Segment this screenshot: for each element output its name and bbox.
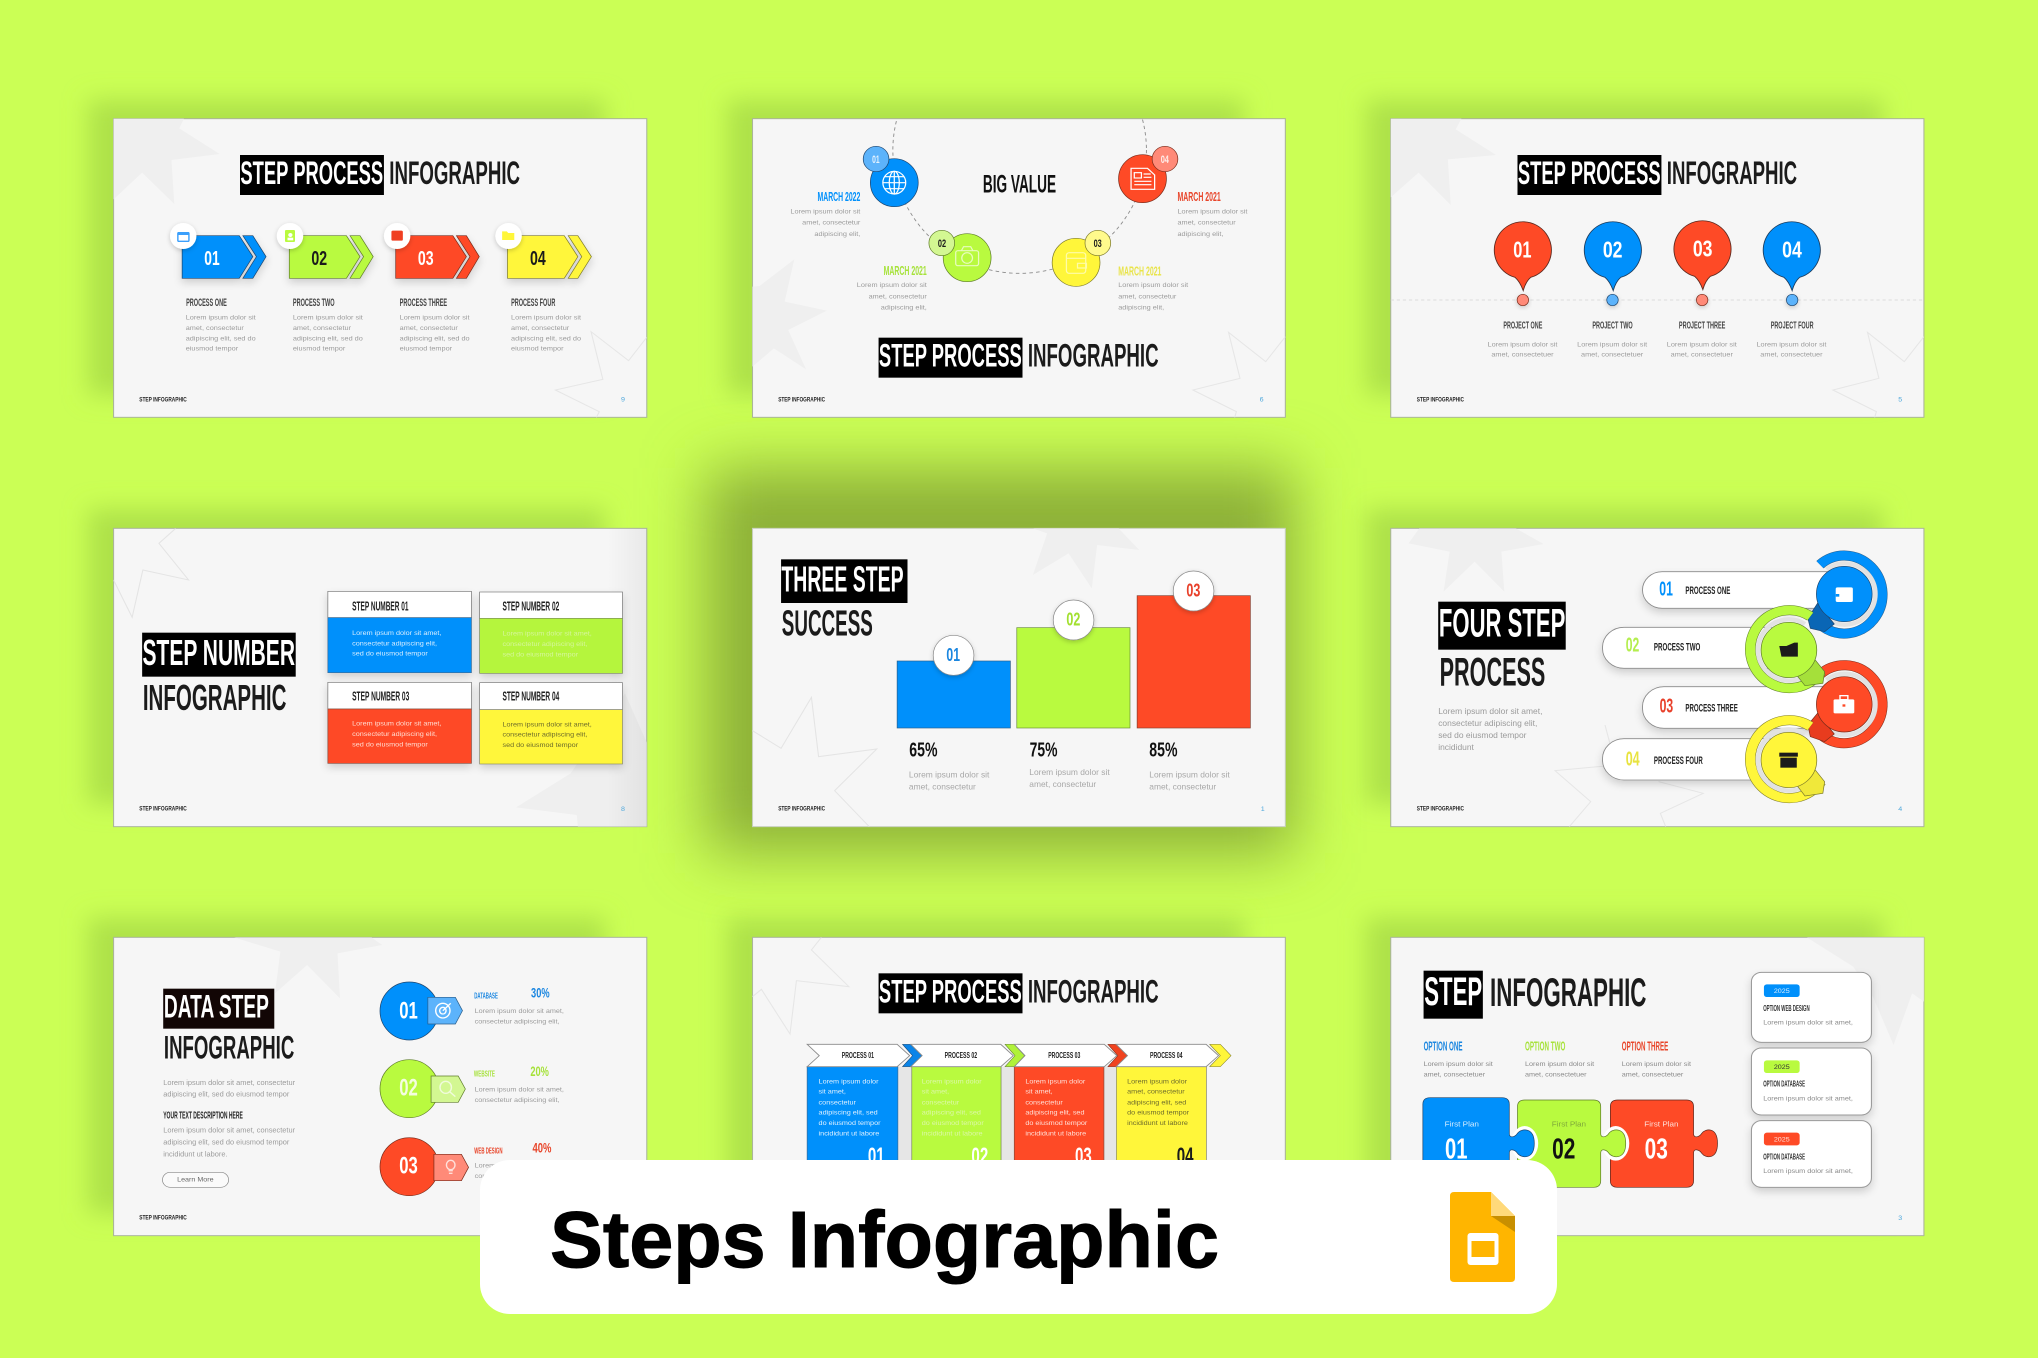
process four text: Lorem ipsum dolor sit xyxy=(511,314,581,322)
stat 65%: Lorem ipsum dolor sit xyxy=(909,771,990,779)
project two text xyxy=(1577,321,1647,359)
card: step number 02: sed do eiusmod tempor xyxy=(502,652,579,658)
heading: data step infographic: DATA STEP xyxy=(164,989,269,1025)
footer xyxy=(139,806,625,813)
process three text: adipiscing elit, sed do xyxy=(400,335,470,342)
footer xyxy=(778,397,1264,404)
item 02 text: WEBSITE xyxy=(474,1069,495,1079)
project four text: PROJECT FOUR xyxy=(1771,321,1814,331)
column 03: Lorem ipsum dolor xyxy=(1025,1079,1086,1085)
step 01 pill: 01 xyxy=(1659,578,1673,600)
footer: 1 xyxy=(1261,806,1265,813)
stat 85%: 85% xyxy=(1149,739,1177,761)
process one text: eiusmod tempor xyxy=(186,345,239,353)
bar 03: 03 xyxy=(1186,580,1201,601)
project three text: PROJECT THREE xyxy=(1679,321,1725,331)
card: step number 04: STEP NUMBER 04 xyxy=(502,689,560,704)
process three text: Lorem ipsum dolor sit xyxy=(400,314,470,322)
column 03: do eiusmod tempor xyxy=(1025,1120,1088,1127)
stat 75%: Lorem ipsum dolor sit xyxy=(1029,768,1110,777)
project one text xyxy=(1488,321,1558,359)
stat 75%: amet, consectetur xyxy=(1029,780,1096,789)
option card 3 xyxy=(1751,1121,1871,1187)
step 03 arrow xyxy=(384,223,479,278)
option card 3: 2025 xyxy=(1774,1137,1790,1143)
process one text: adipiscing elit, sed do xyxy=(186,335,256,342)
node 01 with globe icon xyxy=(863,146,918,207)
option one text xyxy=(1424,1039,1493,1078)
heading: four step process: PROCESS xyxy=(1440,650,1545,694)
step 02 pill xyxy=(1602,627,1788,668)
option card 1 xyxy=(1751,972,1871,1042)
project one text: Lorem ipsum dolor sit xyxy=(1488,341,1558,348)
card: step number 04: consectetur adipiscing elit, xyxy=(502,732,587,739)
stat 85% xyxy=(1149,739,1230,791)
learn more button: Learn More xyxy=(177,1177,214,1184)
card: step number 03: STEP NUMBER 03 xyxy=(352,689,409,704)
stat 85%: Lorem ipsum dolor sit xyxy=(1149,771,1230,779)
process two text: amet, consectetur xyxy=(293,324,352,332)
heading: step infographic: INFOGRAPHIC xyxy=(1490,970,1646,1015)
node 03 with wallet icon xyxy=(1052,230,1111,286)
description text: incididunt ut labore. xyxy=(163,1151,228,1158)
step 04 pill: PROCESS FOUR xyxy=(1654,754,1703,767)
column 02: incididunt ut labore xyxy=(922,1131,983,1137)
march 2022 text: amet, consectetur xyxy=(802,219,861,227)
panel: step infographic puzzle slide xyxy=(1391,937,1924,1236)
bar 02 xyxy=(1017,600,1130,728)
heading: step process infographic: STEP PROCESS xyxy=(240,156,383,192)
puzzle piece 03: First Plan xyxy=(1644,1120,1679,1129)
heading: three step success: THREE STEP xyxy=(781,559,904,599)
process four text: eiusmod tempor xyxy=(511,345,564,353)
project two text: PROJECT TWO xyxy=(1592,321,1633,331)
item 02 with search icon xyxy=(380,1060,465,1118)
footer xyxy=(778,806,1265,813)
stat 65%: 65% xyxy=(909,739,937,761)
process two text: adipiscing elit, sed do xyxy=(293,335,363,342)
march 2021 green text: adipiscing elit, xyxy=(881,304,927,312)
step 04 arrow: 04 xyxy=(530,247,546,270)
column 01: sit amet, xyxy=(819,1089,846,1096)
option one text: OPTION ONE xyxy=(1424,1039,1463,1053)
column 04: amet, consectetur xyxy=(1127,1089,1185,1096)
icon: google slides xyxy=(1450,1192,1515,1282)
puzzle piece 01: First Plan xyxy=(1445,1120,1479,1129)
process two text: eiusmod tempor xyxy=(293,345,346,353)
march 2021 yellow text xyxy=(1118,264,1188,312)
option three text xyxy=(1622,1039,1691,1078)
intro text xyxy=(163,1079,296,1099)
footer: 8 xyxy=(621,806,625,813)
puzzle piece 03 xyxy=(1602,1100,1717,1187)
option one text: amet, consectetuer xyxy=(1424,1072,1486,1078)
item 01 text: DATABASE xyxy=(474,991,498,1001)
column 01: do eiusmod tempor xyxy=(819,1120,881,1127)
option two text xyxy=(1525,1039,1594,1078)
project one text: amet, consectetuer xyxy=(1491,351,1554,359)
step 02 pill: 02 xyxy=(1626,634,1639,656)
card: step number 01: STEP NUMBER 01 xyxy=(352,599,409,614)
column 03: 03 xyxy=(1075,1143,1092,1169)
title card xyxy=(480,1160,1557,1314)
heading: step process infographic: INFOGRAPHIC xyxy=(1667,156,1797,192)
project two text: amet, consectetuer xyxy=(1581,351,1644,359)
item 01 text: Lorem ipsum dolor sit amet, xyxy=(475,1008,564,1015)
project two text: Lorem ipsum dolor sit xyxy=(1577,341,1647,348)
heading: step number infographic xyxy=(142,632,296,718)
project three text: Lorem ipsum dolor sit xyxy=(1667,341,1737,348)
column 04 xyxy=(1116,1044,1231,1169)
march 2021 red text: adipiscing elit, xyxy=(1177,230,1223,238)
card: step number 04 xyxy=(480,683,622,764)
heading: step process infographic: STEP PROCESS xyxy=(879,974,1022,1010)
column 01: adipiscing elit, sed xyxy=(819,1110,878,1117)
pin 02: 02 xyxy=(1603,237,1622,263)
intro text: adipiscing elit, sed do eiusmod tempor xyxy=(163,1091,290,1099)
item 01 text: consectetur adipiscing elit, xyxy=(475,1019,560,1025)
panel: big value timeline slide xyxy=(752,118,1286,418)
item 03 text: 40% xyxy=(532,1141,551,1156)
pin 03: 03 xyxy=(1693,236,1712,262)
stat 65%: amet, consectetur xyxy=(909,783,976,791)
option card 2: 2025 xyxy=(1774,1064,1790,1071)
option card 3: OPTION DATABASE xyxy=(1763,1152,1805,1161)
option two text: amet, consectetuer xyxy=(1525,1072,1587,1078)
bar 01 xyxy=(897,635,1010,728)
card: step number 01: consectetur adipiscing elit, xyxy=(352,641,437,647)
step 02 pill: PROCESS TWO xyxy=(1654,641,1700,653)
item 03 with bulb icon: 03 xyxy=(399,1152,418,1179)
process four text: PROCESS FOUR xyxy=(511,297,555,309)
column 03: consectetur xyxy=(1025,1100,1063,1106)
column 01 xyxy=(807,1044,922,1169)
column 02: adipiscing elit, sed xyxy=(922,1110,981,1117)
step 01 ring with wallet icon xyxy=(1808,556,1882,634)
march 2021 green text: Lorem ipsum dolor sit xyxy=(857,281,927,289)
option card 1: 2025 xyxy=(1774,988,1790,995)
column 01: 01 xyxy=(868,1143,885,1169)
column 01: PROCESS 01 xyxy=(842,1050,874,1060)
description text: YOUR TEXT DESCRIPTION HERE xyxy=(163,1111,243,1122)
footer: 9 xyxy=(621,397,625,404)
description text: incididunt xyxy=(1438,743,1475,752)
step 03 pill xyxy=(1642,687,1853,728)
puzzle piece 01 xyxy=(1423,1098,1534,1187)
step 04 arrow xyxy=(495,223,591,278)
pin 01: 01 xyxy=(1513,237,1531,263)
project four text: Lorem ipsum dolor sit xyxy=(1756,341,1826,348)
panel: four step process slide xyxy=(1391,528,1924,827)
march 2022 text: MARCH 2022 xyxy=(817,189,860,204)
puzzle piece 03: 03 xyxy=(1645,1133,1668,1165)
step 02 ring with folder icon xyxy=(1750,610,1825,688)
process one text: Lorem ipsum dolor sit xyxy=(186,314,256,322)
step 04 pill: 04 xyxy=(1626,748,1640,770)
node 03 with wallet icon: 03 xyxy=(1094,237,1102,250)
process one text: amet, consectetur xyxy=(186,324,245,332)
march 2021 yellow text: Lorem ipsum dolor sit xyxy=(1118,281,1188,289)
column 03: PROCESS 03 xyxy=(1048,1050,1080,1060)
stat 75%: 75% xyxy=(1030,739,1057,761)
column 04: incididunt ut labore xyxy=(1127,1120,1188,1127)
pin 01 xyxy=(1494,222,1551,306)
column 02: sit amet, xyxy=(922,1089,949,1096)
card: step number 02: Lorem ipsum dolor sit amet, xyxy=(502,631,592,638)
footer: STEP INFOGRAPHIC xyxy=(778,806,825,813)
puzzle piece 02 xyxy=(1511,1100,1626,1187)
step 01 pill: PROCESS ONE xyxy=(1685,584,1730,597)
heading: four step process xyxy=(1438,601,1566,694)
puzzle piece 02: 02 xyxy=(1552,1133,1575,1165)
column 01: incididunt ut labore xyxy=(819,1131,879,1137)
heading: step infographic: STEP xyxy=(1424,969,1482,1014)
item 03 text xyxy=(474,1141,564,1180)
march 2021 yellow text: MARCH 2021 xyxy=(1118,264,1161,279)
description text xyxy=(1438,707,1542,752)
panel: project pins slide xyxy=(1391,119,1924,417)
column 04: 04 xyxy=(1177,1143,1194,1169)
project one text: PROJECT ONE xyxy=(1503,321,1542,331)
footer: 4 xyxy=(1898,806,1902,813)
node 02 with camera icon xyxy=(929,230,991,282)
column 01: Lorem ipsum dolor xyxy=(819,1079,879,1085)
card: step number 04: Lorem ipsum dolor sit amet, xyxy=(502,722,592,728)
heading: step number infographic: STEP NUMBER xyxy=(142,632,295,673)
stat 85%: amet, consectetur xyxy=(1149,783,1216,791)
card: step number 02: STEP NUMBER 02 xyxy=(502,599,559,614)
option card 3: Lorem ipsum dolor sit amet, xyxy=(1763,1168,1853,1175)
option card 2: OPTION DATABASE xyxy=(1763,1079,1805,1089)
node 04 with news icon xyxy=(1119,146,1178,203)
heading: four step process: FOUR STEP xyxy=(1439,601,1565,645)
column 04: do eiusmod tempor xyxy=(1127,1110,1190,1117)
card: step number 01: sed do eiusmod tempor xyxy=(352,651,428,658)
column 03: sit amet, xyxy=(1025,1089,1053,1096)
column 02: consectetur xyxy=(922,1100,960,1106)
option three text: amet, consectetuer xyxy=(1622,1072,1684,1078)
column 02: do eiusmod tempor xyxy=(922,1120,984,1127)
march 2021 red text: Lorem ipsum dolor sit xyxy=(1177,208,1247,215)
footer: 6 xyxy=(1260,397,1264,404)
step 01 pill xyxy=(1642,572,1853,608)
step 02 arrow xyxy=(277,223,373,278)
process two text: PROCESS TWO xyxy=(293,297,335,309)
heading: step process infographic: INFOGRAPHIC xyxy=(1028,974,1159,1010)
heading: step process infographic: INFOGRAPHIC xyxy=(1028,339,1159,374)
column 03 xyxy=(1014,1044,1127,1169)
panel: step number cards slide xyxy=(114,528,647,827)
card: step number 01: Lorem ipsum dolor sit amet, xyxy=(352,630,441,637)
process three text: amet, consectetur xyxy=(400,324,458,332)
stat 75% xyxy=(1029,739,1110,789)
project four text xyxy=(1756,321,1826,359)
option two text: OPTION TWO xyxy=(1525,1039,1565,1053)
item 02 text: consectetur adipiscing elit, xyxy=(475,1097,560,1104)
puzzle piece 02: First Plan xyxy=(1552,1120,1586,1129)
item 02 text: Lorem ipsum dolor sit amet, xyxy=(475,1087,564,1094)
description text: Lorem ipsum dolor sit amet, xyxy=(1438,707,1542,716)
pin 04 xyxy=(1763,222,1820,306)
card title: Steps Infographic xyxy=(550,1195,1219,1284)
step 03 pill: PROCESS THREE xyxy=(1685,702,1738,714)
pin 02 xyxy=(1584,222,1641,306)
pin 03 xyxy=(1674,221,1731,306)
card: step number 02: consectetur adipiscing elit, xyxy=(502,641,587,648)
process one text: PROCESS ONE xyxy=(186,297,227,309)
item 03 text: consectetur adipiscing elit, xyxy=(475,1173,560,1180)
process four text: amet, consectetur xyxy=(511,324,570,332)
column 02: PROCESS 02 xyxy=(945,1050,977,1060)
item 02 with search icon: 02 xyxy=(399,1074,418,1101)
description text: sed do eiusmod tempor xyxy=(1438,731,1527,740)
footer: STEP INFOGRAPHIC xyxy=(139,397,187,403)
learn more button xyxy=(162,1172,229,1187)
bar chart xyxy=(897,571,1250,728)
item 01 with target icon: 01 xyxy=(399,997,418,1024)
card: step number 03: Lorem ipsum dolor sit amet, xyxy=(352,721,441,728)
march 2021 yellow text: amet, consectetur xyxy=(1118,293,1177,300)
footer: STEP INFOGRAPHIC xyxy=(139,806,187,813)
card: step number 04: sed do eiusmod tempor xyxy=(502,742,579,749)
heading: step process infographic: INFOGRAPHIC xyxy=(389,156,520,192)
step 02 arrow: 02 xyxy=(311,247,327,270)
description text: consectetur adipiscing elit, xyxy=(1438,719,1537,728)
description text: adipiscing elit, sed do eiusmod tempor xyxy=(163,1139,290,1146)
step 04 ring with box icon xyxy=(1750,720,1825,798)
node 01 with globe icon: 01 xyxy=(872,153,880,166)
step 01 arrow xyxy=(170,223,266,278)
footer: STEP INFOGRAPHIC xyxy=(778,397,825,403)
process one text xyxy=(186,297,256,353)
option card 2: Lorem ipsum dolor sit amet, xyxy=(1763,1096,1853,1103)
pin 04: 04 xyxy=(1782,237,1802,263)
card: step number 01 xyxy=(328,591,471,673)
process two text xyxy=(293,297,363,353)
footer: STEP INFOGRAPHIC xyxy=(139,1215,187,1222)
item 03 text: Lorem ipsum dolor sit amet, xyxy=(475,1163,564,1170)
panel: data step infographic slide xyxy=(114,937,647,1236)
footer: STEP INFOGRAPHIC xyxy=(1417,806,1464,813)
panel: step process columns slide xyxy=(752,936,1286,1160)
option card 2 xyxy=(1751,1048,1871,1115)
column 02 xyxy=(911,1044,1025,1169)
step 03 pill: 03 xyxy=(1660,695,1673,717)
column 01: consectetur xyxy=(819,1100,857,1106)
description text xyxy=(163,1111,296,1158)
process three text xyxy=(400,297,470,353)
bar 01: 01 xyxy=(946,645,960,666)
project four text: amet, consectetuer xyxy=(1760,351,1823,359)
march 2021 yellow text: adipiscing elit, xyxy=(1118,304,1164,312)
footer xyxy=(139,397,625,404)
panel: three step success bar chart slide xyxy=(752,528,1285,827)
project three text xyxy=(1667,321,1737,359)
march 2021 green text: amet, consectetur xyxy=(869,293,927,300)
card: step number 03: sed do eiusmod tempor xyxy=(352,742,428,748)
process two text: Lorem ipsum dolor sit xyxy=(293,314,363,322)
march 2022 text: adipiscing elit, xyxy=(814,230,860,238)
intro text: Lorem ipsum dolor sit amet, consectetur xyxy=(163,1079,296,1087)
column 04: adipiscing elit, sed xyxy=(1127,1100,1186,1106)
footer xyxy=(1417,806,1902,813)
page number: 3 xyxy=(1898,1215,1902,1222)
process four text: adipiscing elit, sed do xyxy=(511,335,581,342)
step 03 ring with briefcase icon xyxy=(1808,665,1882,743)
item 01 text xyxy=(474,986,564,1025)
node 02 with camera icon: 02 xyxy=(938,237,946,250)
project three text: amet, consectetuer xyxy=(1671,351,1734,359)
march 2021 red text: MARCH 2021 xyxy=(1177,189,1221,204)
option three text: Lorem ipsum dolor sit xyxy=(1622,1061,1691,1068)
heading: step process infographic: STEP PROCESS xyxy=(1518,156,1661,192)
heading: data step infographic: INFOGRAPHIC xyxy=(164,1030,294,1066)
item 01 text: 30% xyxy=(531,986,550,1002)
march 2021 red text: amet, consectetur xyxy=(1177,219,1236,227)
heading: step infographic xyxy=(1424,969,1646,1019)
description text: Lorem ipsum dolor sit amet, consectetur xyxy=(163,1127,296,1135)
heading: step process infographic: STEP PROCESS xyxy=(879,339,1022,374)
puzzle piece 01: 01 xyxy=(1445,1133,1467,1165)
footer: 5 xyxy=(1898,397,1902,404)
process three text: PROCESS THREE xyxy=(400,297,447,309)
card: step number 02 xyxy=(480,592,622,673)
heading: step number infographic: INFOGRAPHIC xyxy=(143,677,286,718)
column 04: Lorem ipsum dolor xyxy=(1127,1079,1188,1085)
march 2021 green text: MARCH 2021 xyxy=(884,263,927,278)
option three text: OPTION THREE xyxy=(1622,1039,1668,1053)
march 2022 text xyxy=(790,189,861,238)
step 04 pill xyxy=(1602,739,1788,780)
item 03 with bulb icon xyxy=(380,1138,469,1196)
column 04: PROCESS 04 xyxy=(1150,1050,1183,1060)
option two text: Lorem ipsum dolor sit xyxy=(1525,1061,1594,1068)
item 03 text: WEB DESIGN xyxy=(474,1146,503,1155)
node 04 with news icon: 04 xyxy=(1161,153,1169,166)
card: step number 03: consectetur adipiscing elit, xyxy=(352,731,437,738)
option card 1: Lorem ipsum dolor sit amet, xyxy=(1763,1020,1853,1027)
footer: STEP INFOGRAPHIC xyxy=(1417,397,1464,403)
item 02 text xyxy=(474,1064,564,1104)
heading: three step success: SUCCESS xyxy=(782,603,873,643)
march 2022 text: Lorem ipsum dolor sit xyxy=(790,208,860,215)
process three text: eiusmod tempor xyxy=(400,345,453,353)
column 03: adipiscing elit, sed xyxy=(1025,1110,1085,1117)
heading: three step success xyxy=(781,559,907,643)
step 01 arrow: 01 xyxy=(204,247,220,270)
option card 1: OPTION WEB DESIGN xyxy=(1763,1003,1810,1013)
footer xyxy=(1417,397,1902,404)
march 2021 red text xyxy=(1177,189,1247,238)
column 03: incididunt ut labore xyxy=(1025,1131,1086,1137)
item 01 with target icon xyxy=(380,982,462,1040)
bar 02: 02 xyxy=(1066,609,1080,630)
column 02: Lorem ipsum dolor xyxy=(922,1079,982,1085)
stat 65% xyxy=(909,739,990,791)
heading: data step infographic xyxy=(163,989,294,1066)
option one text: Lorem ipsum dolor sit xyxy=(1424,1061,1493,1068)
step 03 arrow: 03 xyxy=(418,247,434,270)
heading: big value: BIG VALUE xyxy=(983,169,1056,198)
panel: step process arrows slide xyxy=(114,119,647,417)
column 02: 02 xyxy=(971,1143,988,1169)
bar 03 xyxy=(1137,571,1250,728)
card: step number 03 xyxy=(328,682,471,763)
item 02 text: 20% xyxy=(530,1064,549,1080)
process four text xyxy=(511,297,581,353)
march 2021 green text xyxy=(857,263,927,312)
